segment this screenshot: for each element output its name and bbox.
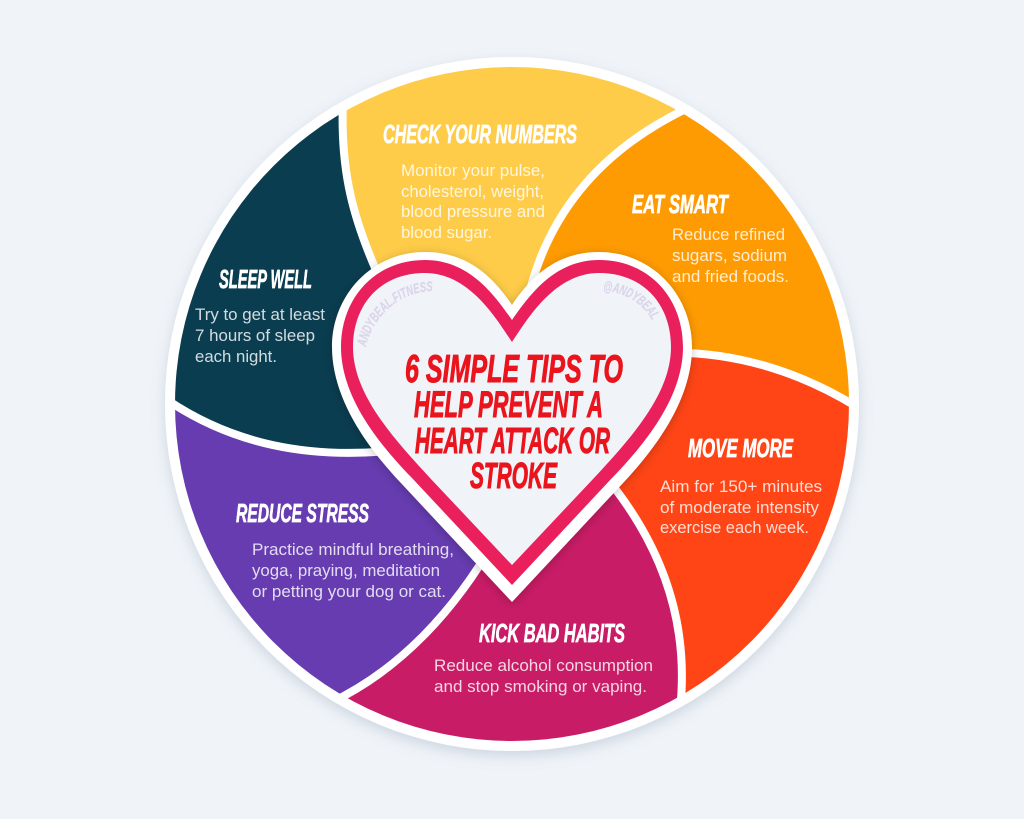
wheel panels	[175, 67, 849, 741]
heart pink border	[341, 260, 683, 585]
panel: check your numbers	[346, 67, 676, 305]
infographic	[160, 57, 864, 760]
panel: reduce stress	[175, 410, 476, 694]
panel: eat smart: Reduce refined	[672, 226, 785, 244]
title	[405, 348, 623, 496]
panel: check your numbers: CHECK YOUR NUMBERS	[383, 119, 577, 149]
watermark right: @ANDYBEAL	[604, 281, 659, 320]
panel: reduce stress: Practice mindful breathing,	[252, 541, 454, 559]
panel dividers	[160, 100, 865, 710]
panel: sleep well: Try to get at least	[195, 306, 326, 324]
panel: eat smart	[539, 114, 849, 398]
panel: reduce stress: REDUCE STRESS	[236, 498, 369, 528]
panel: move more	[619, 357, 849, 693]
panel: check your numbers: blood sugar.	[401, 224, 492, 242]
panel: sleep well: each night.	[195, 348, 277, 366]
panel: reduce stress: yoga, praying, meditation	[252, 562, 440, 580]
panel: check your numbers: blood pressure and	[401, 203, 545, 221]
panel: kick bad habits: and stop smoking or vaping.	[434, 678, 647, 696]
panel: sleep well: SLEEP WELL	[219, 264, 312, 294]
title: HEART ATTACK OR	[415, 420, 610, 461]
panel: reduce stress: or petting your dog or cat.	[252, 583, 446, 601]
panel: eat smart: sugars, sodium	[672, 247, 787, 265]
heart inner fill	[353, 273, 671, 565]
panel: sleep well	[175, 114, 372, 449]
panel: move more: MOVE MORE	[688, 433, 793, 463]
panel: eat smart: and fried foods.	[672, 268, 789, 286]
panel: kick bad habits: KICK BAD HABITS	[479, 618, 625, 648]
watermark left: ANDYBEAL.FITNESS	[357, 281, 432, 348]
heart white border	[332, 252, 692, 602]
panel: move more: Aim for 150+ minutes	[660, 478, 822, 496]
panel: eat smart: EAT SMART	[632, 189, 729, 219]
panel: check your numbers: cholesterol, weight,	[401, 183, 544, 201]
panel: kick bad habits: Reduce alcohol consumption	[434, 657, 653, 675]
title: 6 SIMPLE TIPS TO	[405, 348, 623, 391]
title: STROKE	[470, 455, 558, 496]
title: HELP PREVENT A	[414, 384, 603, 425]
white wheel rim	[165, 57, 859, 751]
panel: sleep well: 7 hours of sleep	[195, 327, 315, 345]
panel: check your numbers: Monitor your pulse,	[401, 162, 545, 180]
heart	[332, 249, 697, 605]
panel: move more: exercise each week.	[660, 519, 809, 537]
panel: kick bad habits	[348, 493, 678, 741]
panel: move more: of moderate intensity	[660, 499, 820, 517]
